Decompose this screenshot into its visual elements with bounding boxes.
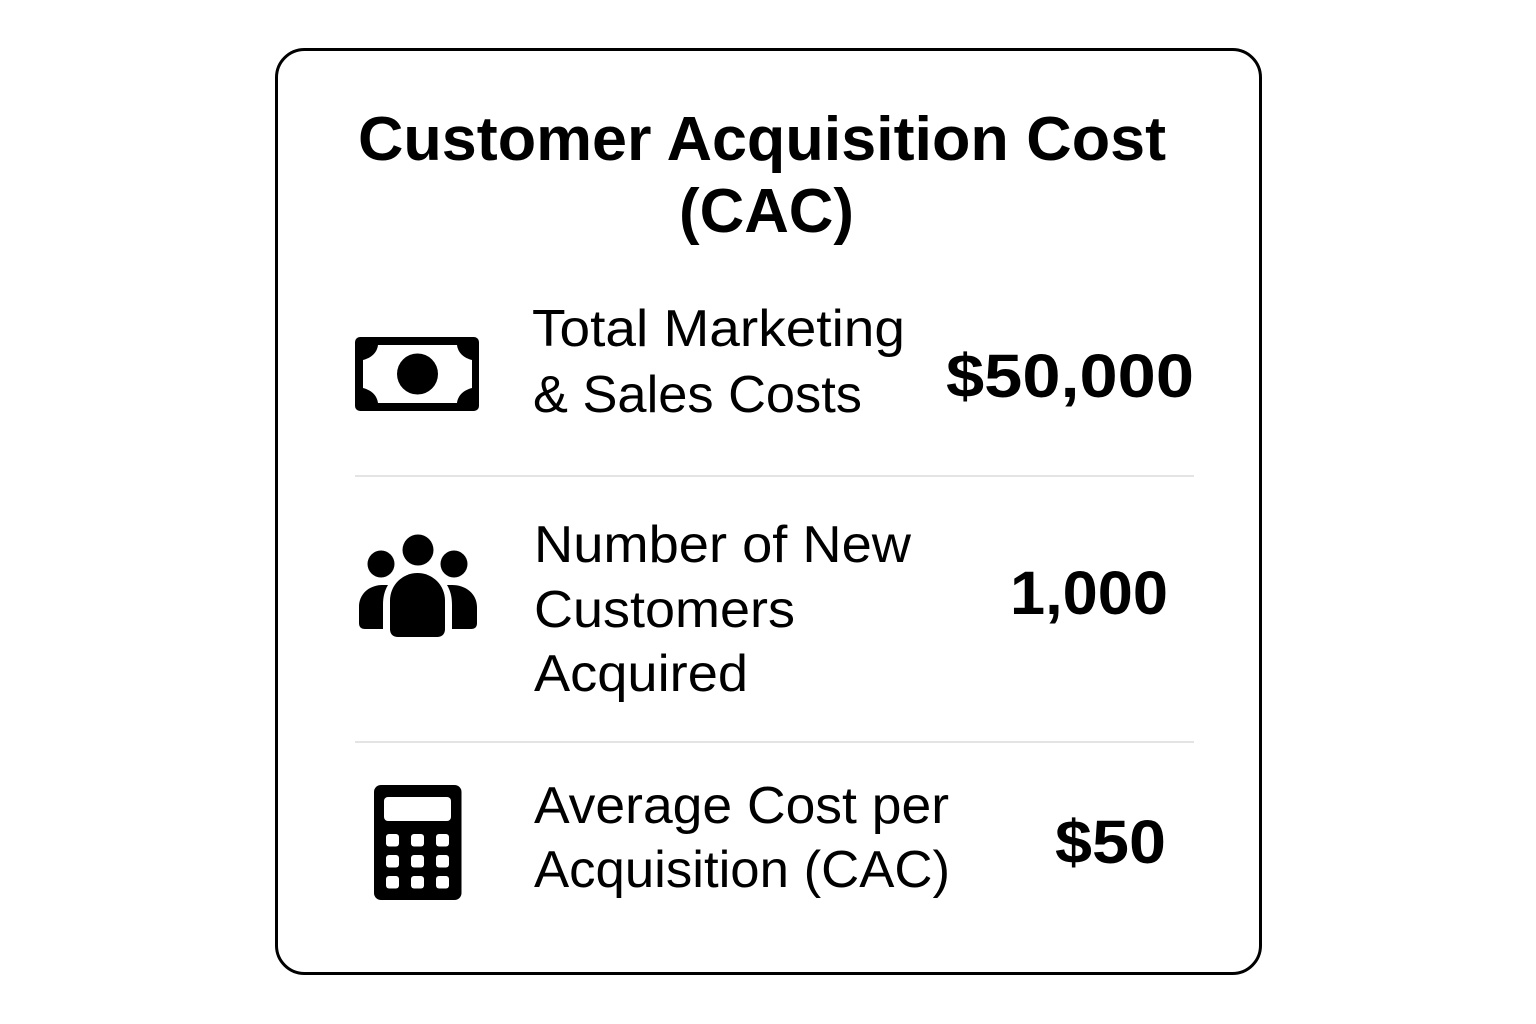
value: average CAC: $50 xyxy=(1055,808,1166,876)
icon: calculator xyxy=(374,785,462,900)
title: Customer Acquisition Cost xyxy=(358,105,1166,174)
icon: group of customers xyxy=(359,534,477,637)
value: total costs: $50,000 xyxy=(946,342,1194,410)
label: total marketing and sales costs: & Sales Costs xyxy=(533,366,862,424)
label: average cost per acquisition xyxy=(534,777,950,899)
label: number of new customers acquired xyxy=(534,516,911,703)
label: average cost per acquisition: Acquisition (CAC) xyxy=(534,841,950,899)
label: number of new customers acquired: Acquired xyxy=(534,645,748,703)
label: number of new customers acquired: Customers xyxy=(534,581,795,639)
label: number of new customers acquired: Number of New xyxy=(534,516,911,574)
title: (CAC) xyxy=(679,177,854,246)
label: average cost per acquisition: Average Cost per xyxy=(534,777,949,835)
title xyxy=(358,105,1166,246)
panel: CAC card xyxy=(276,50,1260,974)
icon: banknote xyxy=(355,337,479,411)
label: total marketing and sales costs xyxy=(532,300,905,424)
value: new customers: 1,000 xyxy=(1010,559,1168,627)
label: total marketing and sales costs: Total Marketing xyxy=(532,300,905,358)
